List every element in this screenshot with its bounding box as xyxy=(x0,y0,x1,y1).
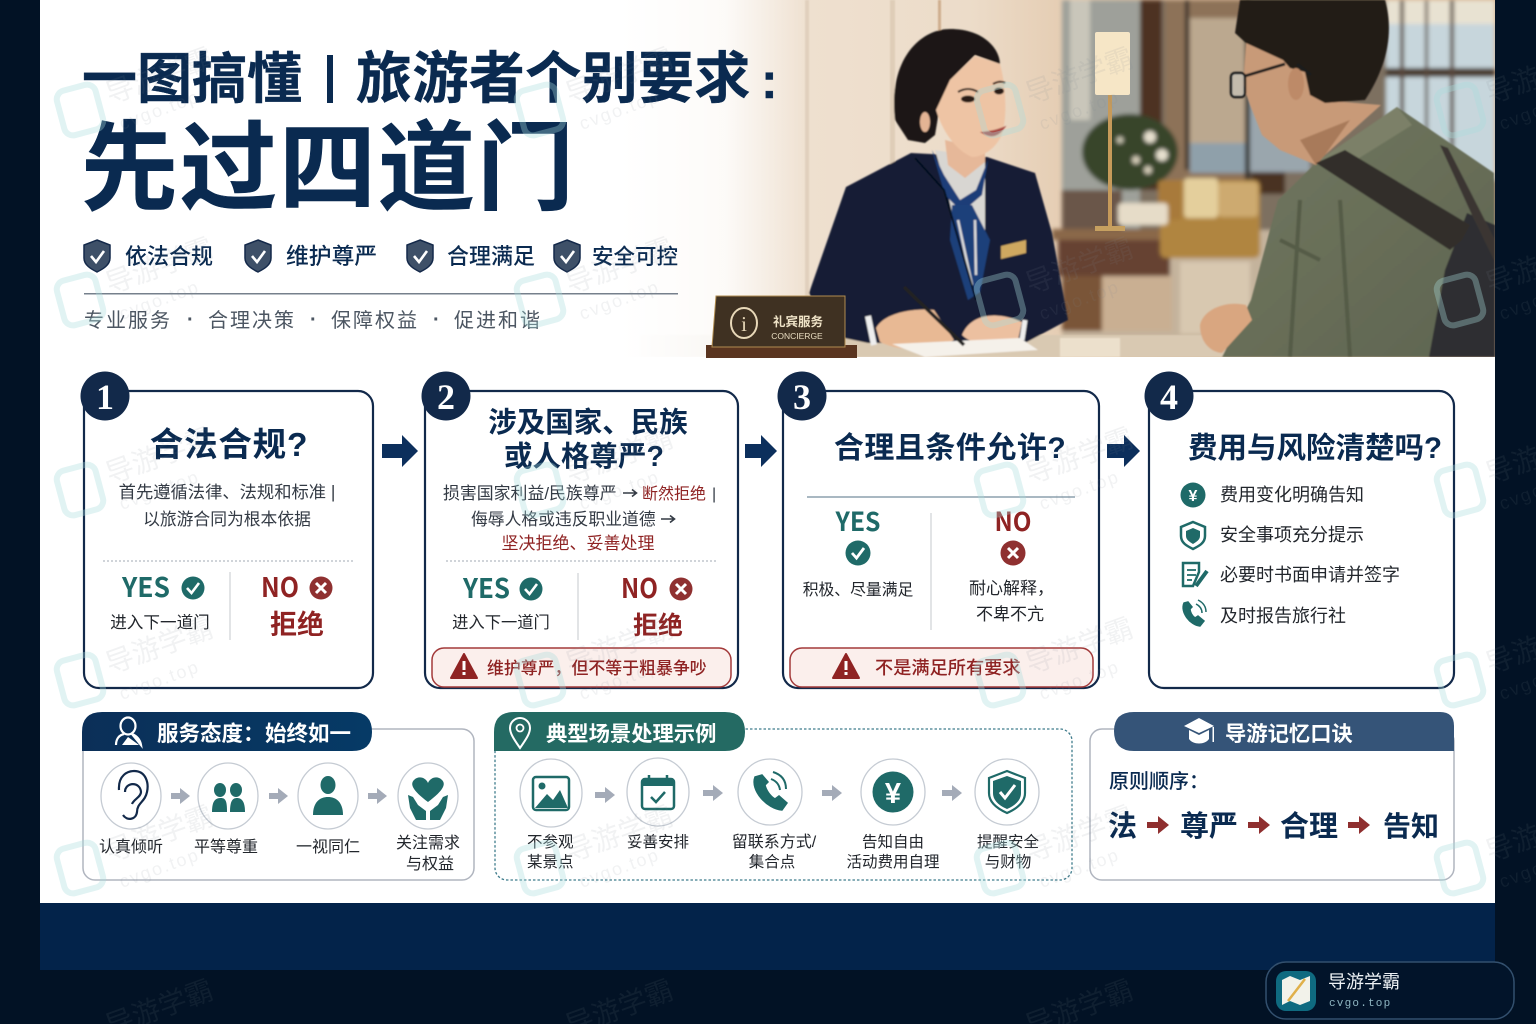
tag: 合理满足 xyxy=(407,240,535,272)
subtitle xyxy=(84,309,542,332)
watermark layer: cvgo.top xyxy=(577,844,662,892)
subtitle: 合理决策 xyxy=(208,309,296,332)
rhyme header: 导游记忆口诀 xyxy=(1225,722,1353,746)
icon: arrange xyxy=(627,758,689,851)
item: fee: 费用变化明确告知 xyxy=(1220,485,1364,505)
principle order sequence xyxy=(1108,810,1439,843)
scenario header: 典型场景处理示例 xyxy=(546,722,716,746)
badge 1: 1 xyxy=(96,377,114,417)
gate 3 no: NO xyxy=(994,502,1032,539)
gate 2 warning xyxy=(432,648,731,687)
panel: typical scenarios xyxy=(494,712,1072,880)
principle order sequence: 尊严 xyxy=(1180,810,1238,843)
gate 1 no: NO xyxy=(261,566,299,605)
panel: gate 3 xyxy=(778,372,1099,688)
gate 3 warning xyxy=(790,648,1093,687)
watermark layer: 导游学霸 xyxy=(561,232,677,300)
watermark layer: 导游学霸 xyxy=(1021,800,1137,868)
concierge desk sign xyxy=(706,296,857,358)
watermark layer: cvgo.top xyxy=(1037,466,1122,514)
badge 2: 2 xyxy=(437,377,455,417)
watermark layer: cvgo.top xyxy=(1037,656,1122,704)
watermark layer: cvgo.top xyxy=(117,656,202,704)
man glasses xyxy=(1231,73,1245,97)
gate 2 no: NO xyxy=(621,567,658,606)
concierge desk sign: 礼宾服务 xyxy=(773,314,823,329)
concierge desk sign: i xyxy=(741,312,747,336)
gate 3 yes xyxy=(803,502,913,599)
hair xyxy=(894,29,1000,143)
gate 1 no xyxy=(261,566,332,640)
gate 2 warning: 维护尊严， xyxy=(487,654,571,679)
cuffs xyxy=(868,316,874,345)
watermark layer: 导游学霸 xyxy=(561,800,677,868)
tag: 依法合规 xyxy=(84,240,213,272)
gate 1 body xyxy=(119,482,335,529)
gate 1 yes xyxy=(110,566,210,632)
watermark layer: 导游学霸 xyxy=(101,800,217,868)
gate 1 heading: 合法合规? xyxy=(150,427,308,464)
collar xyxy=(1322,108,1412,160)
gate 1 body: 首先遵循法律、法规和标准 | xyxy=(119,482,335,502)
icon: skip attraction: 某景点 xyxy=(527,853,574,871)
subtitle: · xyxy=(310,309,319,331)
gate 2 body: 坚决拒绝、妥善处理 xyxy=(502,534,654,553)
subtitle: 保障权益 xyxy=(331,309,419,332)
man jacket xyxy=(1222,107,1495,357)
gate 2 body: 损害国家利益/民族尊严 xyxy=(443,484,617,503)
subtitle: · xyxy=(187,309,196,331)
icon: arrange: 妥善安排 xyxy=(627,833,689,851)
service header: 始终如一 xyxy=(265,717,351,748)
badge 4 xyxy=(1144,372,1194,420)
gate 1 body: 以旅游合同为根本依据 xyxy=(143,510,311,529)
arrow xyxy=(595,787,615,803)
icon: skip attraction xyxy=(520,759,582,871)
subtitle: 促进和谐 xyxy=(454,309,542,332)
brand badge: 导游学霸 xyxy=(1328,972,1400,992)
arrow xyxy=(822,785,842,801)
tag: 安全可控 xyxy=(554,240,678,272)
paper xyxy=(892,338,1038,357)
tag: 合理满足: 合理满足 xyxy=(447,244,535,269)
panel: gate 1 xyxy=(80,372,373,688)
gate 4 heading: 费用与风险清楚吗? xyxy=(1188,432,1442,465)
counter xyxy=(640,335,1270,357)
gate 2 yes: YES xyxy=(462,567,510,606)
gate 2 no: 拒绝 xyxy=(633,612,683,640)
title line two: 先过四道门 xyxy=(81,114,576,223)
rhyme header xyxy=(1114,712,1454,751)
badge 3 xyxy=(778,372,826,420)
icon: free activity cost: 活动费用自理 xyxy=(846,853,940,871)
watermark layer: cvgo.top xyxy=(577,86,662,134)
item: safety xyxy=(1181,522,1364,549)
tag: 安全可控: 安全可控 xyxy=(592,245,678,269)
tag: 依法合规: 依法合规 xyxy=(125,244,213,269)
shirt and scarf xyxy=(934,150,986,231)
man neck and face xyxy=(1243,43,1381,165)
gate 2 warning: 但不等于粗暴争吵 xyxy=(572,654,707,679)
item: report call: 及时报告旅行社 xyxy=(1220,606,1346,626)
title line one xyxy=(82,47,778,110)
name badge xyxy=(1001,240,1026,259)
icon: leave contact: 集合点 xyxy=(749,853,795,871)
icon: listen xyxy=(99,763,163,856)
watermark layer: cvgo.top xyxy=(117,86,202,134)
icon: leave contact xyxy=(732,759,817,871)
gate 3 no: 耐心解释， xyxy=(969,574,1054,599)
arrow 2 to 3 xyxy=(745,435,777,467)
arrow xyxy=(703,785,723,801)
badge 2 xyxy=(422,372,470,420)
gate 2 no xyxy=(621,567,692,640)
watermark layer: 导游学霸 xyxy=(561,42,677,110)
gate 2 heading: 涉及国家、民族 xyxy=(488,407,688,439)
arrow 3 to 4 xyxy=(1107,435,1140,467)
watermark layer: cvgo.top xyxy=(1037,86,1122,134)
watermark layer: 导游学霸 xyxy=(1021,42,1137,110)
icon: map logo xyxy=(1276,971,1316,1011)
service header xyxy=(82,712,372,751)
man hair xyxy=(1235,0,1389,103)
icon: leave contact: 留联系方式/ xyxy=(732,833,817,851)
woman jacket xyxy=(809,153,1068,343)
icon: free activity cost xyxy=(846,759,940,871)
icon: free activity cost: ¥ xyxy=(885,778,901,810)
subtitle: 专业服务 xyxy=(84,309,172,332)
principle order sequence: 告知 xyxy=(1383,811,1439,842)
panel: memory rhyme xyxy=(1090,712,1454,880)
gate 3 yes: YES xyxy=(835,502,880,539)
item: report call xyxy=(1183,600,1346,626)
watermark layer: 导游学霸 xyxy=(101,42,217,110)
tag: 维护尊严 xyxy=(245,240,377,272)
title line one: 旅游者个别要求 xyxy=(356,47,751,110)
watermark layer: 导游学霸 xyxy=(1021,422,1137,490)
navy footer band xyxy=(40,903,1495,970)
item: fee xyxy=(1180,482,1364,508)
gate 2 yes xyxy=(452,567,550,632)
gate 2 heading xyxy=(488,407,688,473)
title line one: : xyxy=(761,53,778,109)
icon: equal treatment xyxy=(296,763,360,856)
arrow xyxy=(368,788,387,804)
lapels xyxy=(915,158,976,300)
watermark layer: 导游学霸 xyxy=(1021,612,1137,680)
watermark layer: 导游学霸 xyxy=(101,612,217,680)
arrow xyxy=(171,788,190,804)
icon: safety reminder: 提醒安全 xyxy=(977,833,1039,851)
gate 2 body: 断然拒绝 xyxy=(642,485,706,503)
icon: skip attraction: 不参观 xyxy=(527,833,574,851)
panel: service attitude xyxy=(82,712,474,880)
watermark layer: 导游学霸 xyxy=(561,612,677,680)
principle order sequence: 法 xyxy=(1108,810,1137,843)
watermark layer: 导游学霸 xyxy=(101,422,217,490)
gate 3 heading: 合理且条件允许? xyxy=(834,432,1066,465)
hero photo: concierge talking with traveller xyxy=(620,0,1495,357)
gate 1 yes: 进入下一道门 xyxy=(110,613,210,632)
principle order sequence: 合理 xyxy=(1280,810,1338,843)
gate 3 no: 不卑不亢 xyxy=(976,605,1044,624)
watermark layer: cvgo.top xyxy=(117,844,202,892)
watermark layer: cvgo.top xyxy=(577,466,662,514)
watermark layer: cvgo.top xyxy=(1037,276,1122,324)
watermark layer: 导游学霸 xyxy=(1021,232,1137,300)
subtitle: · xyxy=(433,309,442,331)
gate 2 body: | xyxy=(712,486,716,503)
icon: safety reminder: 与财物 xyxy=(985,853,1031,871)
service header: 服务态度： xyxy=(157,717,265,748)
backpack xyxy=(1429,213,1495,357)
panel: gate 2 xyxy=(422,372,738,688)
principle order label: 原则顺序： xyxy=(1109,765,1209,794)
brand badge: cvgo.top xyxy=(1329,998,1391,1010)
badge 4: 4 xyxy=(1160,377,1178,417)
gate 3 no xyxy=(969,502,1054,624)
watermark layer: cvgo.top xyxy=(117,466,202,514)
watermark layer: cvgo.top xyxy=(577,656,662,704)
badge 1 xyxy=(80,372,130,420)
wall pilaster detail xyxy=(805,0,809,300)
face xyxy=(936,56,1005,157)
gate 1 no: 拒绝 xyxy=(270,610,324,640)
gate 1 yes: YES xyxy=(121,566,170,605)
scenario header xyxy=(494,712,745,751)
watermark layer: 导游学霸 xyxy=(101,232,217,300)
badge 3: 3 xyxy=(793,377,811,417)
icon: care: 关注需求 xyxy=(396,834,460,852)
icon: equal respect: 平等尊重 xyxy=(194,838,258,856)
icon: listen: 认真倾听 xyxy=(99,838,163,856)
arrow 1 to 2 xyxy=(382,435,418,467)
icon: safety reminder xyxy=(975,759,1039,871)
man hand xyxy=(1200,304,1252,353)
principle tags xyxy=(84,240,678,272)
woman hands xyxy=(876,310,954,349)
icon: equal treatment: 一视同仁 xyxy=(296,838,360,856)
tag: 维护尊严: 维护尊严 xyxy=(286,243,377,269)
title line one: 一图搞懂 xyxy=(82,48,302,110)
arrow xyxy=(942,785,962,801)
item: safety: 安全事项充分提示 xyxy=(1220,525,1364,545)
pen xyxy=(904,287,964,345)
icon: free activity cost: 告知自由 xyxy=(862,833,924,851)
watermark layer: cvgo.top xyxy=(577,276,662,324)
watermark layer: 导游学霸 xyxy=(561,422,677,490)
concierge desk sign: CONCIERGE xyxy=(771,331,823,341)
item: written request: 必要时书面申请并签字 xyxy=(1220,565,1400,585)
gate 2 body: 侮辱人格或违反职业道德 xyxy=(471,510,656,529)
gate 3 yes: 积极、尽量满足 xyxy=(803,581,913,599)
item: fee: ¥ xyxy=(1189,488,1198,505)
icon: care xyxy=(396,763,460,873)
gate 2 heading: 或人格尊严? xyxy=(504,440,664,473)
icon: care: 与权益 xyxy=(406,855,454,873)
watermark layer: cvgo.top xyxy=(1037,844,1122,892)
icon: equal respect xyxy=(194,763,258,856)
watermark layer: cvgo.top xyxy=(117,276,202,324)
gate 2 yes: 进入下一道门 xyxy=(452,614,550,632)
arrow xyxy=(269,788,288,804)
brand badge xyxy=(1266,962,1514,1019)
panel: gate 4 xyxy=(1144,372,1454,688)
gate 2 body xyxy=(443,484,716,553)
neck xyxy=(945,140,985,178)
gate 3 warning: 不是满足所有要求 xyxy=(875,658,1021,678)
